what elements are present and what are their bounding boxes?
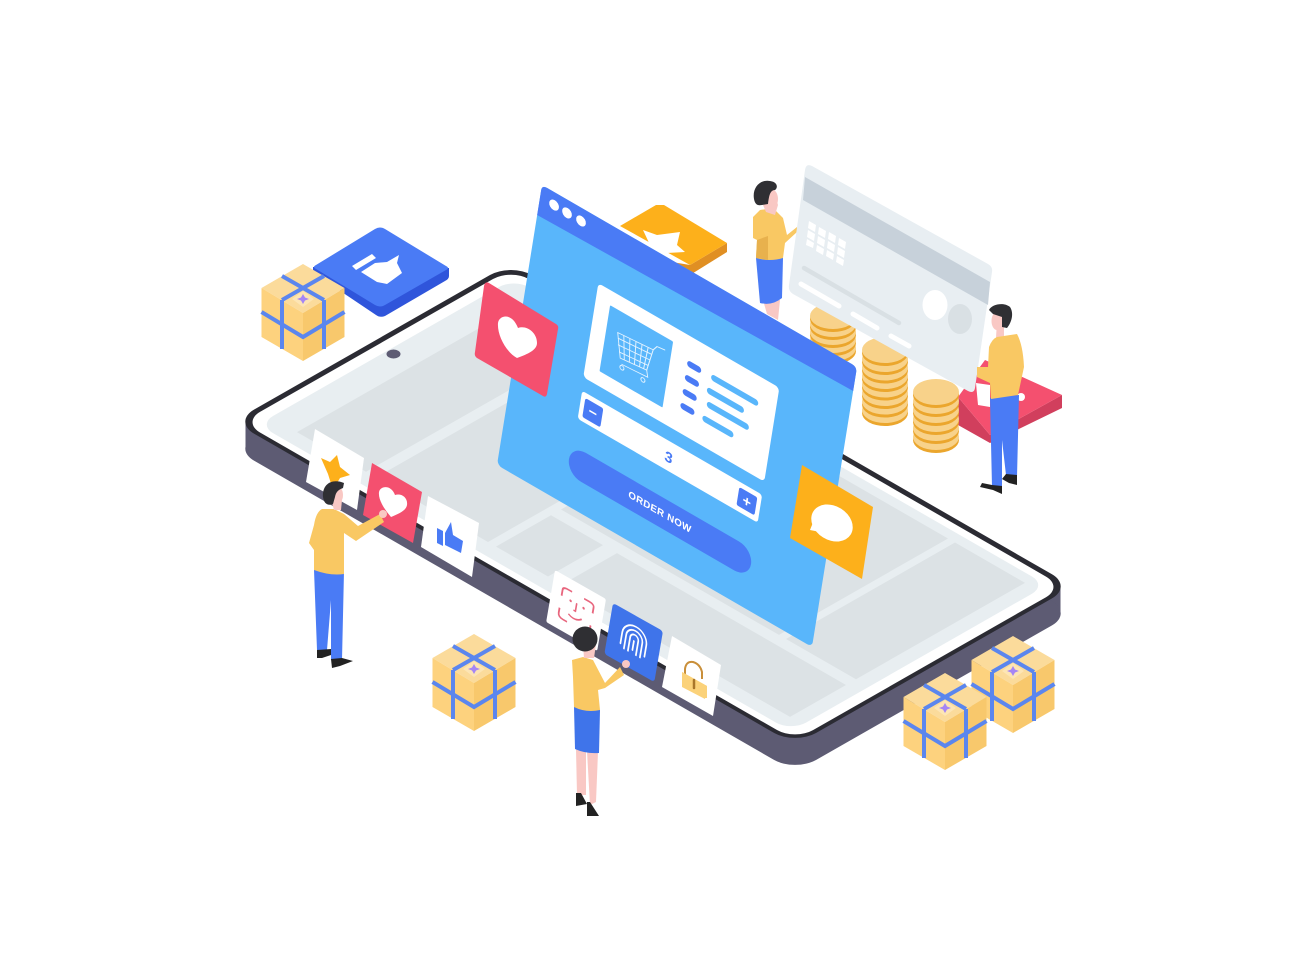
- card details: [801, 268, 909, 346]
- quantity stepper: 3: [663, 448, 674, 468]
- order button: ORDER NOW: [628, 490, 692, 536]
- phone side: [233, 290, 1073, 772]
- camera dot: [386, 350, 400, 358]
- parcel box: right front: [904, 673, 986, 770]
- floating tile: heart: [475, 282, 558, 397]
- window header: [537, 185, 857, 397]
- icon: shopping cart: [613, 324, 665, 391]
- credit card: [789, 165, 992, 392]
- coin stack: rear: [810, 303, 856, 364]
- flat tile: blue thumbs up: [313, 228, 449, 317]
- parcel box: right rear: [972, 636, 1054, 733]
- quantity stepper: −: [587, 403, 598, 423]
- phone: [233, 263, 1073, 772]
- order window: [497, 185, 857, 647]
- tile: fingerprint: [604, 603, 663, 682]
- parcel box: top left: [262, 264, 344, 361]
- product detail lines: [680, 360, 759, 449]
- person: man at tiles: [309, 481, 387, 668]
- floating tile: chat: [790, 465, 873, 579]
- flat tile: red thumbs up: [958, 360, 1062, 443]
- product card: [583, 283, 779, 482]
- tile: face id: [546, 570, 606, 651]
- quantity stepper: [578, 391, 762, 523]
- phone screen: [233, 263, 1073, 745]
- coin stack: front: [913, 379, 959, 453]
- tile: heart: [363, 463, 422, 543]
- person: woman at card: [753, 181, 797, 320]
- card stripe: [803, 177, 990, 305]
- tile: star: [306, 429, 364, 510]
- parcel box: bottom centre: [432, 634, 516, 731]
- coin stack: middle: [862, 337, 908, 426]
- person: man at card: [977, 304, 1024, 494]
- person: woman at fingerprint: [572, 626, 630, 816]
- card chip: [806, 221, 846, 266]
- flat tile: orange thumbs up: [620, 205, 727, 275]
- quantity stepper: +: [741, 492, 752, 512]
- order button: [567, 445, 753, 579]
- tile: thumbs up: [421, 496, 479, 577]
- tile: lock: [662, 636, 721, 716]
